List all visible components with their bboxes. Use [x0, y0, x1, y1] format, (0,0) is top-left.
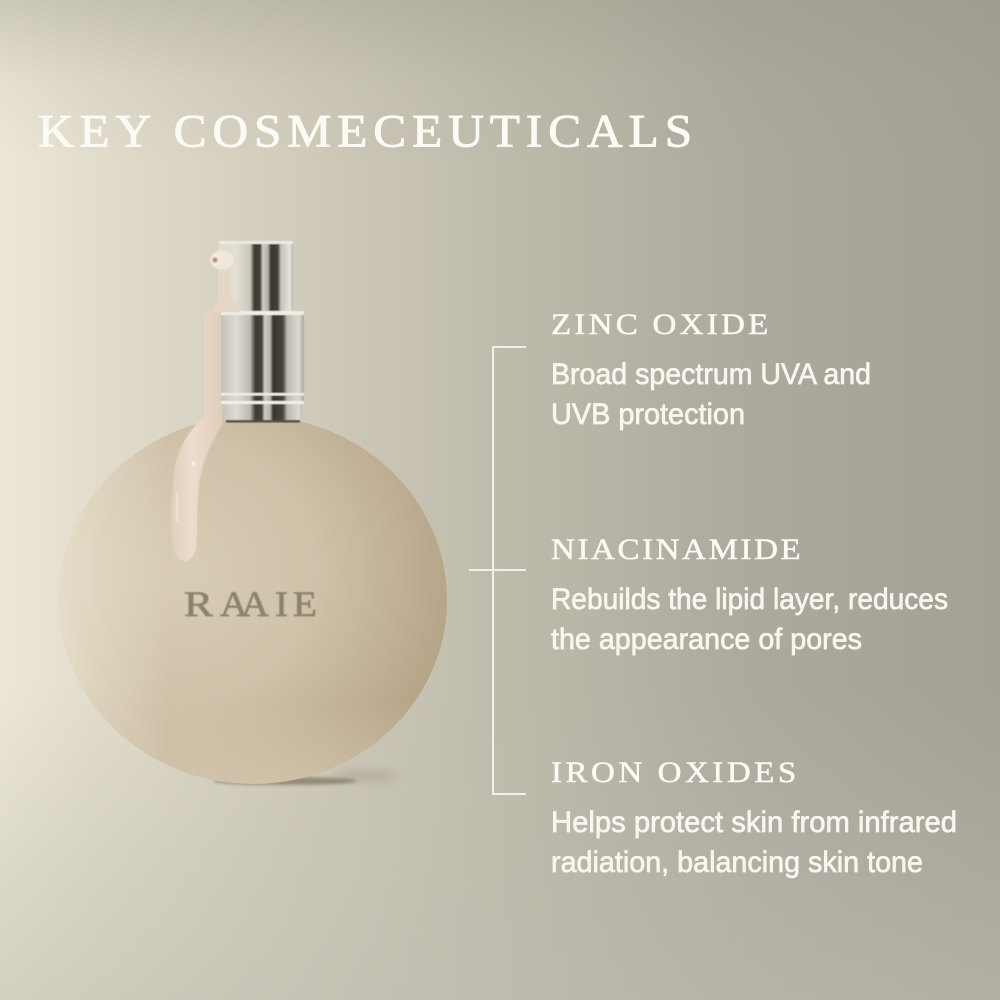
- ingredient: iron oxides: [551, 756, 957, 879]
- product: pump bottle: [59, 241, 447, 785]
- cream drip: [171, 250, 240, 561]
- ingredient: niacinamide: [551, 533, 948, 656]
- ingredient: iron oxides: IRON OXIDES: [551, 756, 796, 789]
- brand logo: E: [293, 584, 317, 624]
- ingredient: zinc oxide: UVB protection: [551, 398, 745, 431]
- ingredient: zinc oxide: Broad spectrum UVA and: [551, 358, 871, 391]
- title: KEY COSMECEUTICALS: [38, 106, 692, 157]
- bottle shadow: [213, 771, 397, 785]
- ingredient: iron oxides: Helps protect skin from infrared: [551, 806, 957, 839]
- brand logo: [184, 584, 317, 624]
- ingredient: zinc oxide: [551, 308, 871, 431]
- bracket connector: [469, 346, 526, 795]
- brand logo: A: [241, 584, 269, 624]
- ingredient: niacinamide: the appearance of pores: [551, 623, 862, 656]
- ingredient: iron oxides: radiation, balancing skin tone: [551, 846, 923, 879]
- ingredient: niacinamide: Rebuilds the lipid layer, reduces: [551, 583, 948, 616]
- brand logo: A: [220, 584, 248, 624]
- brand logo: I: [275, 584, 288, 624]
- pump: [216, 241, 304, 422]
- ingredient: niacinamide: NIACINAMIDE: [551, 533, 801, 566]
- ingredient: zinc oxide: ZINC OXIDE: [551, 308, 768, 341]
- bottle body: [59, 416, 447, 784]
- brand logo: R: [184, 584, 213, 624]
